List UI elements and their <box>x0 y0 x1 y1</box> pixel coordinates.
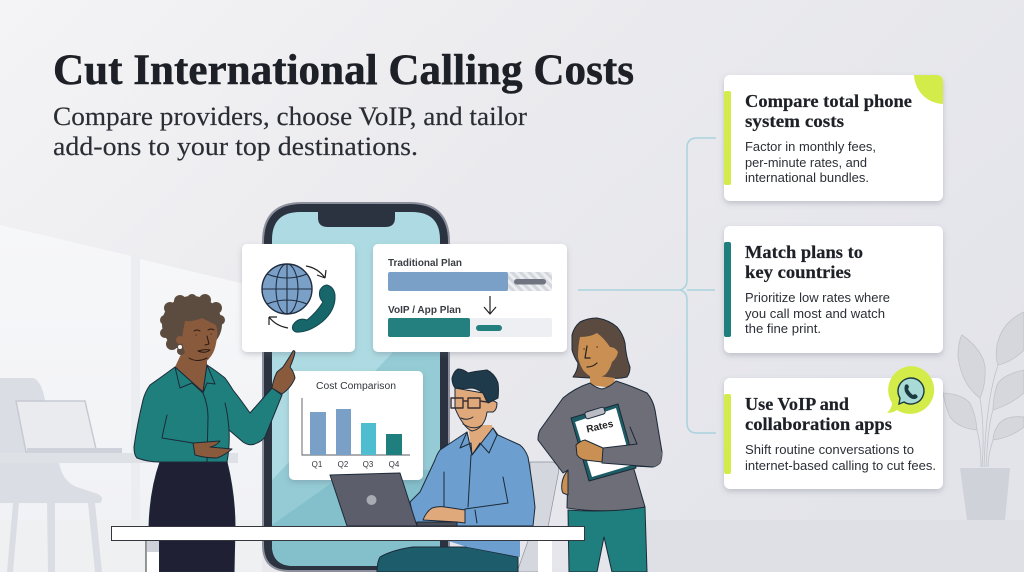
voip plan label: VoIP / App Plan <box>388 305 461 316</box>
accent bar <box>724 394 731 474</box>
trousers <box>568 507 647 572</box>
phone illustration <box>263 203 449 571</box>
hand <box>423 507 465 523</box>
arrow down <box>484 296 496 314</box>
ear and earring <box>176 336 184 349</box>
traditional plan bar <box>388 272 552 291</box>
card heading <box>745 394 892 434</box>
shirt seams <box>162 393 229 462</box>
card: compare total phone system costs <box>722 75 946 206</box>
card heading: Use VoIP and <box>745 394 849 414</box>
person: seated man <box>330 369 535 572</box>
card heading <box>745 91 912 131</box>
card heading <box>745 242 863 282</box>
face <box>455 388 497 431</box>
axis labels: Q3 <box>363 460 374 469</box>
chart title: Cost Comparison <box>316 381 396 392</box>
shirt <box>134 365 282 462</box>
chair behind seated person <box>517 462 559 572</box>
card heading: Match plans to <box>745 242 863 262</box>
bars <box>310 409 402 455</box>
face <box>578 333 618 378</box>
card heading: Compare total phone <box>745 91 912 111</box>
neck <box>590 375 615 388</box>
card body: the fine print. <box>745 322 821 336</box>
card body <box>745 291 890 336</box>
hair <box>452 369 498 403</box>
collar <box>175 365 215 393</box>
background desk, chair and laptop <box>0 378 238 572</box>
card: use voip and collaboration apps <box>724 366 943 489</box>
pointing hand <box>272 351 295 394</box>
card: match plans to key countries <box>724 226 943 353</box>
legs <box>377 547 518 572</box>
neck <box>175 350 207 393</box>
subtitle: Compare providers, choose VoIP, and tailor <box>53 102 527 131</box>
glasses <box>451 398 487 408</box>
right forearm <box>602 444 662 467</box>
collar <box>460 428 497 455</box>
card body: per-minute rates, and <box>745 156 867 170</box>
lower hand <box>193 441 232 458</box>
connector bracket <box>578 138 716 433</box>
sweater <box>538 381 662 511</box>
holding hand <box>576 440 603 462</box>
subtitle second line: add-ons to your top destinations. <box>53 132 418 161</box>
axis labels <box>312 460 400 469</box>
shirt seams <box>444 455 508 523</box>
clipboard <box>571 404 636 481</box>
card heading: collaboration apps <box>745 414 892 434</box>
title: Cut International Calling Costs <box>53 47 634 94</box>
hair <box>572 318 630 378</box>
icon: chat bubble with phone <box>887 366 934 414</box>
sleeve seams <box>602 427 653 467</box>
icon: globe <box>262 264 312 314</box>
card heading: system costs <box>745 111 844 131</box>
hair <box>160 294 225 355</box>
icon: telephone handset <box>292 285 335 332</box>
table leg <box>146 541 159 572</box>
card body <box>745 140 876 185</box>
face <box>182 318 217 362</box>
axis labels: Q1 <box>312 460 323 469</box>
facial features <box>189 329 214 360</box>
smile <box>461 417 482 428</box>
card body: international bundles. <box>745 171 869 185</box>
card body <box>745 443 936 473</box>
laptop <box>330 473 457 526</box>
clipboard label: Rates <box>585 419 615 436</box>
axis labels: Q4 <box>389 460 400 469</box>
card body: Factor in monthly fees, <box>745 140 876 154</box>
desk top <box>112 526 584 540</box>
voip plan bar <box>388 318 552 337</box>
left hand <box>562 470 568 495</box>
shirt lower <box>445 540 520 557</box>
shirt <box>410 428 535 526</box>
accent bar <box>724 91 731 185</box>
traditional plan label: Traditional Plan <box>388 258 462 269</box>
facial features <box>584 346 597 367</box>
accent bar <box>724 242 731 337</box>
card heading: key countries <box>745 262 851 282</box>
neck <box>468 425 493 455</box>
chair lower section <box>538 541 552 572</box>
card body: internet-based calling to cut fees. <box>745 459 936 473</box>
corner accent <box>914 75 943 104</box>
person: woman with clipboard <box>538 318 662 572</box>
card body: Shift routine conversations to <box>745 443 914 457</box>
card body: you call most and watch <box>745 307 885 321</box>
bar chart: cost comparison <box>289 371 423 480</box>
skirt <box>149 462 235 572</box>
axis labels: Q2 <box>338 460 349 469</box>
panel: globe and phone icon <box>242 244 355 352</box>
card body: Prioritize low rates where <box>745 291 890 305</box>
panel: plan comparison <box>373 244 567 352</box>
icon: cycle arrows <box>269 266 326 328</box>
decorative plant <box>943 312 1024 520</box>
person: presenter <box>134 294 295 572</box>
